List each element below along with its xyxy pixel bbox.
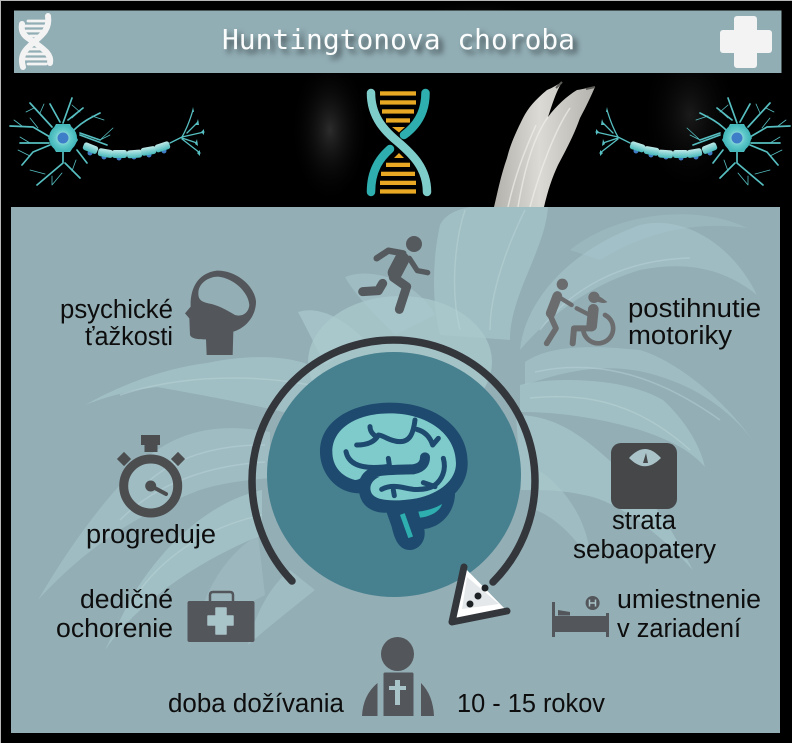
label — [56, 586, 173, 643]
item: strata sebaopatery — [573, 443, 716, 564]
item: progreduje — [86, 435, 216, 549]
label — [628, 295, 761, 350]
item: postihnutie motoriky — [547, 279, 761, 350]
item: doba dozivania — [168, 637, 605, 718]
icon: hospital bed — [552, 596, 609, 637]
title: Huntingtonova choroba — [222, 23, 575, 56]
icon: large DNA helix — [371, 91, 427, 194]
icon: white medical cross — [720, 16, 772, 68]
progress arrow — [252, 340, 535, 622]
icon: head with brain — [185, 271, 256, 355]
neuron right — [596, 98, 790, 185]
label: dedičné — [80, 586, 173, 614]
label: doba dožívania — [168, 690, 345, 718]
icon: priest with cross — [362, 637, 434, 716]
label: motoriky — [628, 322, 732, 350]
label: strata — [612, 507, 677, 535]
label — [573, 507, 716, 564]
item: umiestnenie v zariadeni — [552, 586, 761, 643]
center ellipse — [267, 352, 521, 597]
label: postihnutie — [628, 295, 761, 323]
item: dedicne ochorenie — [56, 586, 254, 643]
petal streaks — [120, 210, 720, 590]
label: v zariadení — [617, 615, 741, 643]
icon: small white DNA — [22, 16, 50, 67]
icon: caregiver and wheelchair — [547, 279, 613, 343]
icon: medical kit — [188, 592, 254, 642]
icon: bathroom scale — [611, 443, 677, 509]
label: ťažkosti — [85, 323, 173, 351]
label: umiestnenie — [617, 586, 761, 614]
label — [617, 586, 761, 643]
icon: stopwatch — [117, 435, 185, 513]
main panel — [11, 207, 780, 733]
label: progreduje — [86, 521, 216, 549]
dark photo haze — [290, 0, 740, 205]
icon: brain — [320, 403, 468, 550]
neuron left — [10, 98, 204, 185]
white petal photo fragment — [494, 82, 595, 207]
label: psychické — [60, 296, 173, 324]
item: running person — [363, 236, 428, 309]
header bar — [14, 10, 782, 73]
label: ochorenie — [56, 615, 173, 643]
label: sebaopatery — [573, 536, 716, 564]
item: psychicke tazkosti — [60, 271, 256, 355]
flower photo watermark — [38, 207, 758, 650]
label — [60, 296, 173, 351]
value: 10 - 15 rokov — [457, 690, 605, 718]
